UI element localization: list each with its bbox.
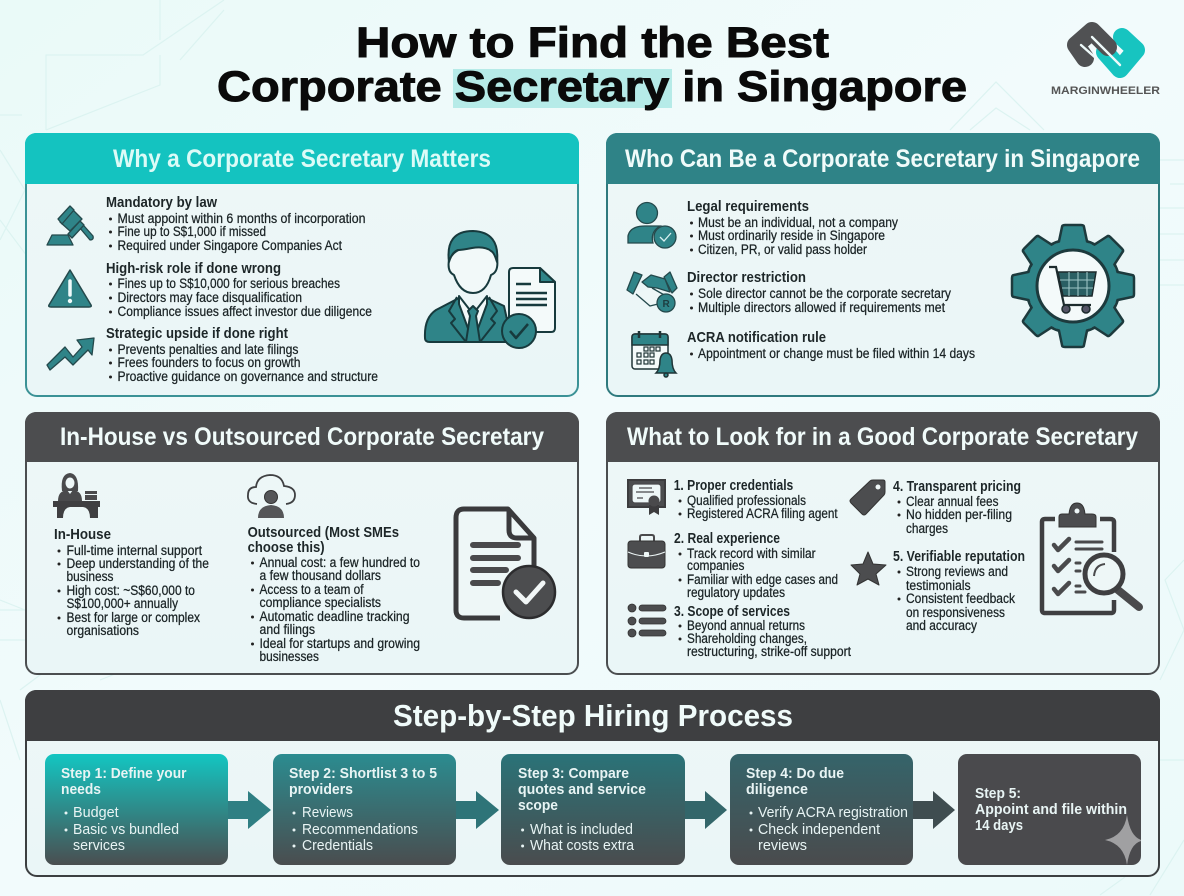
text block: in-house: Full-time internal support xyxy=(66,543,202,558)
text block: mandatory by law: Must appoint within 6 months of incorporation xyxy=(118,211,366,226)
text block: strategic upside: Strategic upside if done right xyxy=(106,325,288,342)
step 3: quotes and service xyxy=(518,781,646,798)
step 2: Credentials xyxy=(302,837,373,854)
text block: strategic upside xyxy=(106,325,378,384)
text block: strategic upside: Proactive guidance on governance and structure xyxy=(118,369,378,384)
step 4 xyxy=(730,754,913,865)
text block: outsourced xyxy=(248,524,420,664)
icon: gavel xyxy=(47,206,93,245)
title: How to Find the Best xyxy=(356,19,829,67)
icon: list xyxy=(628,604,666,637)
step 3 xyxy=(501,754,685,865)
icon: star xyxy=(851,552,886,585)
text block: real experience: 2. Real experience xyxy=(674,530,780,547)
heading: step-by-step: Step-by-Step Hiring Process xyxy=(393,698,793,733)
text block: legal requirements: Must be an individual, not a company xyxy=(698,215,898,230)
step 3: What costs extra xyxy=(530,837,635,854)
arrow 3 xyxy=(685,791,727,829)
icon: calendar with bell xyxy=(632,331,676,377)
step 1: needs xyxy=(61,781,101,798)
title xyxy=(217,19,967,111)
text block: transparent pricing: Clear annual fees xyxy=(906,494,999,509)
text block: legal requirements: Must ordinarily reside in Singapore xyxy=(698,228,885,243)
text block: in-house: Best for large or complex xyxy=(66,610,200,625)
step 1: Step 1: Define your xyxy=(61,765,187,782)
text block: scope of services xyxy=(674,603,851,659)
text block: high-risk role: Directors may face disqualification xyxy=(118,290,302,305)
step 2 xyxy=(273,754,456,865)
icon: warning triangle xyxy=(49,270,91,307)
heading: why: Why a Corporate Secretary Matters xyxy=(113,145,491,173)
icon: document with check xyxy=(456,509,555,618)
text block: real experience: regulatory updates xyxy=(687,585,785,600)
text block: director restriction: Sole director cannot be the corporate secretary xyxy=(698,286,951,301)
heading: in-house vs outsourced: In-House vs Outsourced Corporate Secretary xyxy=(60,423,544,451)
text block: high-risk role: Fines up to S$10,000 for serious breaches xyxy=(118,276,340,291)
step 4: Check independent xyxy=(758,821,881,838)
text block: outsourced: businesses xyxy=(260,649,319,664)
text block: in-house: business xyxy=(66,569,114,584)
text block: in-house: High cost: ~S$60,000 to xyxy=(66,583,195,598)
step 2: Recommendations xyxy=(302,821,418,838)
text block: high-risk role xyxy=(106,260,372,319)
icon: handshake: R xyxy=(662,299,670,310)
text block: in-house: Deep understanding of the xyxy=(66,556,209,571)
icon: rising arrow xyxy=(47,338,94,370)
step 4: Verify ACRA registration xyxy=(758,804,908,821)
arrow 2 xyxy=(456,791,499,829)
text block: proper credentials: 1. Proper credentials xyxy=(674,477,793,494)
step 3: Step 3: Compare xyxy=(518,765,629,782)
text block: mandatory by law: Fine up to S$1,000 if missed xyxy=(118,224,266,239)
text block: high-risk role: Compliance issues affect investor due diligence xyxy=(118,304,372,319)
step 3: scope xyxy=(518,797,558,814)
text block: outsourced: a few thousand dollars xyxy=(260,568,381,583)
logo: MarginWheeler: MARGINWHEELER xyxy=(1051,85,1160,97)
step 2: providers xyxy=(289,781,353,798)
step 1 xyxy=(45,754,228,865)
heading: who: Who Can Be a Corporate Secretary in Singapore xyxy=(625,145,1140,173)
icon: handshake xyxy=(627,272,677,312)
text block: proper credentials: Registered ACRA filing agent xyxy=(687,506,838,521)
icon: gear with shopping cart xyxy=(1012,225,1134,347)
text block: mandatory by law: Mandatory by law xyxy=(106,194,217,211)
step 1: services xyxy=(73,837,125,854)
icon: businessman with document xyxy=(425,231,555,348)
text block: verifiable reputation: Strong reviews and xyxy=(906,564,1008,579)
step 1: Basic vs bundled xyxy=(73,821,179,838)
text block: mandatory by law: Required under Singapore Companies Act xyxy=(118,238,342,253)
text block: real experience: Familiar with edge cases and xyxy=(687,572,838,587)
text block: strategic upside: Prevents penalties and late filings xyxy=(118,342,299,357)
text block: outsourced: compliance specialists xyxy=(260,595,381,610)
text block: legal requirements: Citizen, PR, or valid pass holder xyxy=(698,242,867,257)
panel: who can be a corporate secretary xyxy=(606,133,1160,396)
text block: transparent pricing: charges xyxy=(906,521,948,536)
text block: director restriction xyxy=(687,269,951,315)
text block: director restriction: Multiple directors allowed if requirements met xyxy=(698,300,945,315)
step 5: 14 days xyxy=(975,817,1023,834)
text block: real experience xyxy=(674,530,838,600)
text block: scope of services: 3. Scope of services xyxy=(674,603,790,620)
text block: verifiable reputation: testimonials xyxy=(906,578,971,593)
text block: verifiable reputation xyxy=(893,548,1025,633)
step 1: Budget xyxy=(73,804,119,821)
text block: mandatory by law xyxy=(106,194,366,253)
step 4: diligence xyxy=(746,781,808,798)
icon: cloud with person xyxy=(248,475,295,518)
text block: outsourced: Access to a team of xyxy=(260,582,364,597)
step 4: Step 4: Do due xyxy=(746,765,844,782)
text block: transparent pricing xyxy=(893,478,1021,536)
text block: outsourced: Annual cost: a few hundred to xyxy=(260,555,420,570)
text block: verifiable reputation: on responsiveness xyxy=(906,605,1005,620)
icon: clipboard with magnifier xyxy=(1042,503,1139,613)
step 5: Step 5: xyxy=(975,785,1021,802)
text block: scope of services: restructuring, strike-off support xyxy=(687,644,851,659)
text block: ACRA notification rule: Appointment or change must be filed within 14 days xyxy=(698,346,975,361)
text block: in-house: organisations xyxy=(66,623,139,638)
text block: outsourced: choose this) xyxy=(248,539,325,556)
icon: person at desk xyxy=(53,473,100,518)
text block: legal requirements xyxy=(687,198,898,257)
heading: what to look for: What to Look for in a Good Corporate Secretary xyxy=(627,423,1138,451)
panel: step-by-step hiring process xyxy=(25,690,1160,876)
text block: verifiable reputation: and accuracy xyxy=(906,618,977,633)
icon: sparkle xyxy=(1105,815,1141,865)
text block: verifiable reputation: 5. Verifiable reputation xyxy=(893,548,1025,565)
text block: scope of services: Shareholding changes, xyxy=(687,631,807,646)
text block: ACRA notification rule: ACRA notification rule xyxy=(687,329,826,346)
text block: real experience: Track record with similar xyxy=(687,546,816,561)
title: Corporate Secretary in Singapore xyxy=(217,63,967,111)
text block: outsourced: Ideal for startups and growing xyxy=(260,636,420,651)
text block: proper credentials: Qualified professionals xyxy=(687,493,806,508)
text block: legal requirements: Legal requirements xyxy=(687,198,809,215)
text block: proper credentials xyxy=(674,477,838,521)
text block: in-house: S$100,000+ annually xyxy=(66,596,178,611)
icon: certificate xyxy=(628,480,665,515)
text block: ACRA notification rule xyxy=(687,329,975,361)
text block: scope of services: Beyond annual returns xyxy=(687,618,805,633)
step 5: Appoint and file within xyxy=(975,801,1127,818)
text block: director restriction: Director restriction xyxy=(687,269,806,286)
step 2: Step 2: Shortlist 3 to 5 xyxy=(289,765,437,782)
step 3: What is included xyxy=(530,821,633,838)
text block: outsourced: and filings xyxy=(260,622,315,637)
icon: briefcase xyxy=(628,535,665,568)
logo: MarginWheeler xyxy=(1051,31,1160,97)
arrow 4 xyxy=(913,791,955,829)
panel: what to look for xyxy=(606,412,1160,674)
panel: in-house vs outsourced xyxy=(25,412,579,674)
icon: price tag xyxy=(850,480,885,515)
step 5 xyxy=(958,754,1141,865)
text block: in-house xyxy=(54,526,209,638)
text block: in-house: In-House xyxy=(54,526,111,543)
text block: transparent pricing: 4. Transparent pricing xyxy=(893,478,1021,495)
panel: why a corporate secretary matters xyxy=(25,133,579,396)
text block: real experience: companies xyxy=(687,558,745,573)
text block: outsourced: Automatic deadline tracking xyxy=(260,609,410,624)
icon: person with check xyxy=(628,202,676,248)
text block: verifiable reputation: Consistent feedback xyxy=(906,591,1015,606)
text block: high-risk role: High-risk role if done wrong xyxy=(106,260,281,277)
step 2: Reviews xyxy=(302,804,353,821)
text block: strategic upside: Frees founders to focus on growth xyxy=(118,355,300,370)
text block: outsourced: Outsourced (Most SMEs xyxy=(248,524,399,541)
arrow 1 xyxy=(228,791,271,829)
text block: transparent pricing: No hidden per-filing xyxy=(906,507,1012,522)
step 4: reviews xyxy=(758,837,807,854)
